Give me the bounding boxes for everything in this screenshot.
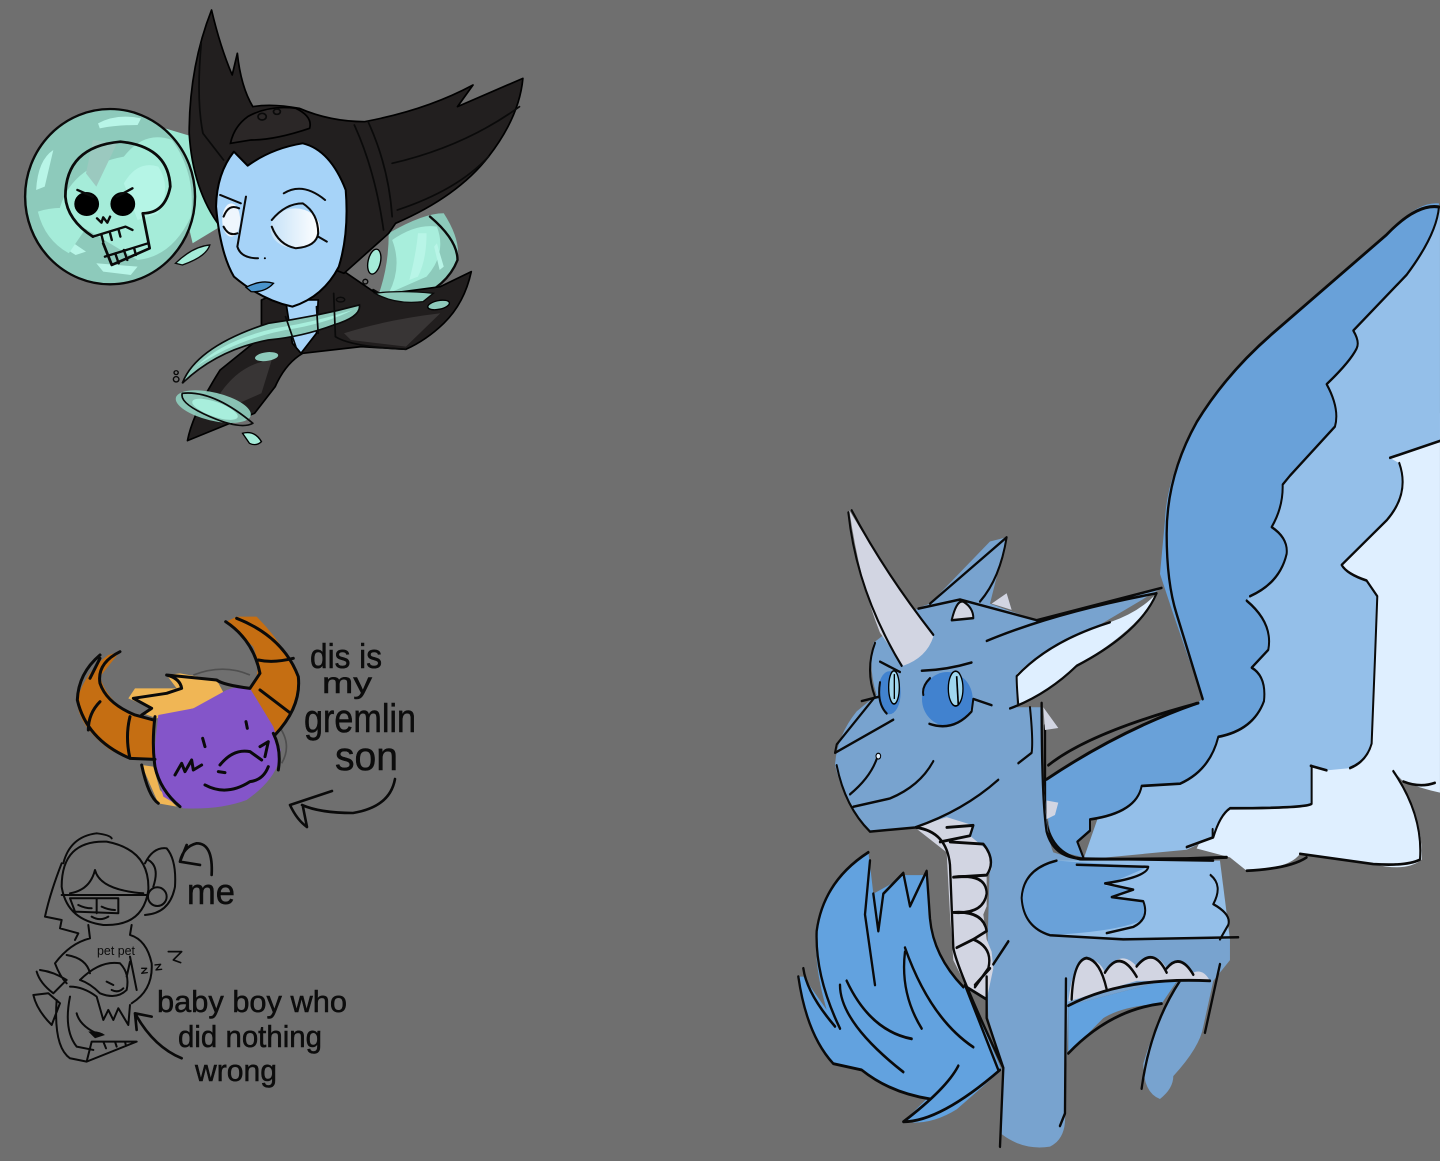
illustration: blue dragon bbox=[798, 510, 1238, 1147]
body, neck and head fill bbox=[835, 537, 1230, 1147]
shoulders and cape bbox=[187, 267, 471, 441]
belly plates bbox=[1068, 956, 1210, 1002]
handwritten note: dis is my gremlin son: dis is bbox=[310, 638, 382, 676]
handwritten note: dis is my gremlin son: gremlin bbox=[304, 697, 416, 741]
black horned headdress bbox=[189, 10, 523, 273]
feathered tail bbox=[798, 852, 1002, 1123]
sketch: me holding sleeping baby dragon bbox=[33, 833, 212, 1062]
hair crest bbox=[128, 673, 227, 718]
arrow to baby bbox=[135, 1013, 182, 1058]
handwritten note: dis is my gremlin son: son bbox=[335, 735, 398, 779]
dragon eyes bbox=[862, 662, 992, 759]
handwritten label: me: me bbox=[187, 871, 235, 912]
chest plates bbox=[915, 817, 993, 999]
grey halo line bbox=[193, 669, 286, 763]
horn bbox=[849, 510, 933, 666]
wing: pale feathers bbox=[1197, 413, 1440, 871]
wing linework bbox=[1045, 207, 1440, 871]
small label: pet pet: pet pet bbox=[97, 943, 135, 958]
sleep z marks bbox=[142, 964, 162, 973]
horn left bbox=[77, 652, 155, 759]
ear inner bbox=[1017, 593, 1157, 705]
neck bbox=[286, 300, 318, 353]
belly strip bbox=[1068, 977, 1180, 1053]
arrow to me bbox=[180, 843, 212, 875]
bubble tail behind the hat bbox=[165, 128, 220, 243]
head linework bbox=[77, 618, 299, 807]
back spikes bbox=[952, 593, 1058, 819]
dragon linework bbox=[835, 510, 1220, 1147]
skull linework bbox=[65, 142, 170, 265]
arrow pointing to gremlin bbox=[290, 779, 395, 827]
my head bbox=[45, 833, 175, 940]
magic ribbons and droplets bbox=[172, 248, 450, 445]
illustration: large blue wing bbox=[1045, 203, 1440, 871]
handwritten note: baby boy who did nothing wrong: did nothing bbox=[178, 1019, 322, 1054]
illustration: sorceress with skull bubble bbox=[25, 10, 523, 445]
handwritten note: baby boy who did nothing wrong: wrong bbox=[194, 1053, 277, 1088]
my body and sleeping dragon bbox=[33, 925, 152, 1062]
skull in a glass bubble bbox=[25, 108, 210, 285]
handwritten note: baby boy who did nothing wrong: baby boy who bbox=[157, 984, 347, 1019]
wing: dark feathers bbox=[1045, 203, 1439, 857]
wing: mid feathers bbox=[1083, 208, 1440, 860]
handwritten note: baby boy who did nothing wrong bbox=[157, 984, 347, 1088]
horn right bbox=[227, 617, 298, 735]
illustration: purple gremlin dragon head bbox=[77, 617, 299, 809]
swirl of green magic on the right bbox=[373, 213, 458, 303]
handwritten note: dis is my gremlin son bbox=[304, 638, 416, 779]
handwritten note: dis is my gremlin son: my bbox=[322, 667, 372, 700]
small folded wing bbox=[1022, 859, 1238, 939]
blue face bbox=[216, 143, 347, 307]
purple face bbox=[153, 687, 281, 809]
